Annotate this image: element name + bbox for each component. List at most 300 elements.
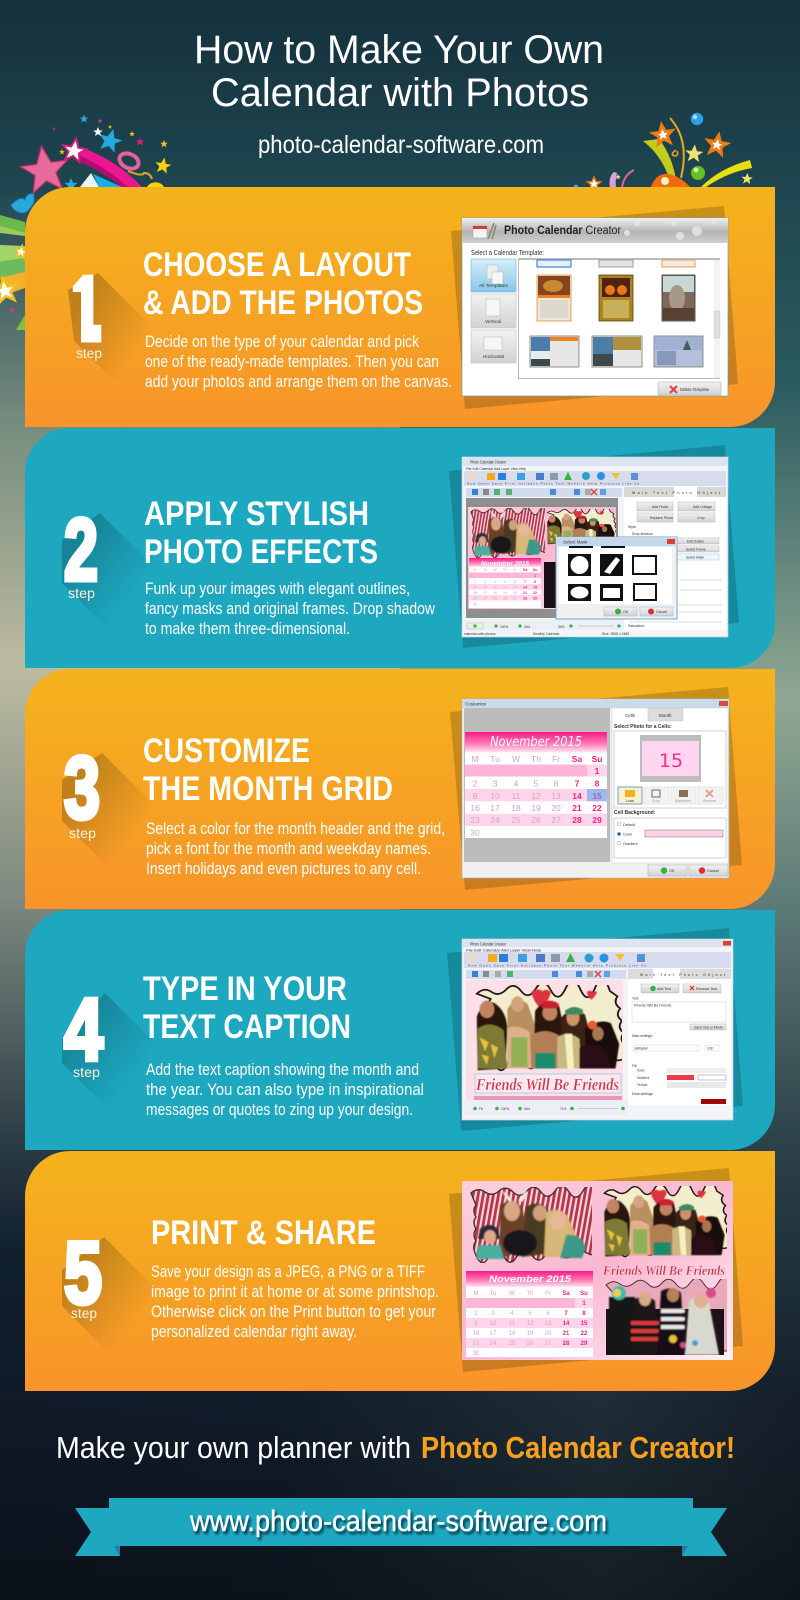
category: vertical — [471, 294, 516, 328]
description: fancy masks and original frames. Drop shadow — [145, 599, 436, 618]
description: Funk up your images with elegant outlines, — [145, 579, 410, 598]
calendar: 13 — [513, 586, 517, 590]
right panel: Color — [637, 1068, 646, 1072]
calendar: 11 — [493, 586, 497, 590]
screenshot: text caption: File Edit Calendar Add Layer View Help — [466, 948, 541, 952]
screenshot: photo effects: Photo Calendar Creator — [470, 460, 506, 464]
settings column: Month — [659, 713, 672, 718]
screenshot: text caption — [462, 939, 733, 1120]
calendar preview: Tu — [490, 754, 500, 764]
dialog: select mask — [556, 537, 677, 619]
calendar preview: 29 — [592, 815, 602, 825]
step label: step — [69, 825, 96, 841]
number shadow — [62, 993, 155, 1113]
screenshot: customize dialog: Customize — [465, 702, 487, 706]
photo: party group — [606, 1277, 735, 1355]
calendar preview: 22 — [592, 803, 602, 813]
photo: hawaii group — [604, 1181, 731, 1257]
number shadow — [62, 1237, 154, 1356]
calendar: 17 — [490, 1331, 497, 1337]
next photo strip — [474, 1096, 622, 1100]
step number: 1 — [72, 262, 100, 357]
calendar preview: 4 — [514, 778, 519, 788]
secondary toolbar — [466, 970, 626, 979]
number shadow — [68, 273, 150, 393]
heading: APPLY STYLISH — [144, 495, 369, 533]
calendar preview: 24 — [490, 815, 500, 825]
calendar preview: 21 — [572, 803, 582, 813]
calendar: 9 — [474, 1321, 478, 1327]
website subtitle: photo-calendar-software.com — [258, 131, 544, 159]
step label: step — [71, 1305, 97, 1321]
caption: Friends Will Be Friends — [602, 1264, 725, 1279]
ok button — [648, 865, 687, 876]
calendar: 16 — [473, 1331, 480, 1337]
description: the year. You can also type in inspirational — [146, 1080, 424, 1099]
step number: 4 — [64, 980, 103, 1079]
screenshot: photo effects: File Edit Calendar Add Layer View Help — [466, 467, 526, 471]
settings column — [612, 708, 728, 863]
calendar preview: 11 — [512, 791, 521, 801]
calendar preview: 9 — [473, 791, 478, 801]
right panel: Add Photo — [652, 505, 668, 509]
right panel: Replace Photo — [650, 516, 673, 520]
panel background — [25, 669, 775, 909]
calendar: 7 — [564, 1311, 568, 1317]
heading: TEXT CAPTION — [143, 1008, 351, 1046]
calendar: W — [509, 1291, 515, 1297]
calendar: Th — [503, 568, 507, 572]
photo: bunny group — [471, 507, 551, 558]
heading — [143, 246, 423, 322]
calendar: Su — [533, 568, 537, 572]
description — [146, 819, 445, 878]
right panel: Text: — [632, 996, 639, 1000]
calendar: 10 — [490, 1321, 497, 1327]
right panel — [624, 486, 726, 630]
screenshot: template chooser — [462, 218, 728, 396]
status bar: 71% — [560, 1107, 567, 1111]
calendar: W — [493, 568, 497, 572]
description: image to print it at home or at some printshop. — [151, 1282, 439, 1301]
panel background — [25, 187, 775, 427]
calendar: 4 — [494, 580, 496, 584]
description: Insert holidays and even pictures to any cell. — [146, 859, 421, 878]
calendar: 10 — [483, 586, 487, 590]
right panel: Insert Year or Month — [694, 1026, 723, 1030]
delete button: Delete Template — [680, 387, 709, 392]
photo: party — [544, 562, 574, 608]
heading: CUSTOMIZE — [143, 732, 310, 770]
right panel: Friends Will Be Friends — [634, 1004, 671, 1008]
settings column: Select Photo for a Cells: — [614, 724, 672, 730]
description: Decide on the type of your calendar and pick — [145, 332, 419, 351]
settings column: Cell Background: — [614, 810, 656, 816]
calendar preview: Sa — [572, 754, 582, 764]
confetti left — [0, 114, 172, 330]
calendar preview: 27 — [551, 815, 561, 825]
description: personalized calendar right away. — [151, 1322, 357, 1341]
status bar: Grid — [524, 625, 530, 629]
calendar: 29 — [581, 1341, 588, 1347]
calendar: 19 — [527, 1331, 534, 1337]
calendar: November 2015 — [489, 1274, 572, 1285]
right tail — [682, 1508, 727, 1556]
calendar: 24 — [483, 596, 487, 600]
tilted backing — [449, 1168, 743, 1372]
calendar: 13 — [545, 1321, 552, 1327]
photo: hawaii group — [477, 979, 627, 1070]
calendar: 16 — [473, 591, 477, 595]
calendar preview: 7 — [575, 778, 580, 788]
description — [151, 1262, 439, 1341]
calendar: 11 — [509, 1321, 516, 1327]
right panel: Main Text Photo Object — [640, 973, 726, 977]
settings column: Remove — [703, 799, 716, 803]
description: Add the text caption showing the month and — [146, 1060, 419, 1079]
right panel: Fill: — [632, 1064, 637, 1068]
calendar: 4 — [510, 1311, 514, 1317]
calendar: 14 — [563, 1321, 570, 1327]
secondary toolbar — [466, 488, 622, 497]
step number: 2 — [64, 500, 98, 599]
calendar preview: 2 — [473, 778, 478, 788]
calendar: 25 — [509, 1341, 516, 1347]
calendar: 27 — [545, 1341, 552, 1347]
screenshot: photo effects: Size: 3508 x 2480 — [602, 632, 629, 636]
calendar preview: 16 — [470, 803, 480, 813]
description: pick a font for the month and weekday names. — [146, 839, 431, 858]
left fold — [114, 1546, 120, 1556]
calendar: M — [474, 568, 476, 572]
right panel — [628, 968, 731, 1105]
right panel: Crop — [697, 516, 705, 520]
calendar: Su — [580, 1291, 588, 1297]
calendar: 12 — [503, 586, 507, 590]
calendar: 28 — [523, 596, 527, 600]
calendar preview: 3 — [493, 778, 498, 788]
description: Select a color for the month header and the grid, — [146, 819, 445, 838]
settings column: Alignment — [675, 799, 691, 803]
description: Save your design as a JPEG, a PNG or a TIFF — [151, 1262, 425, 1281]
call to action: Make your own planner with — [56, 1430, 411, 1465]
calendar: 18 — [493, 591, 497, 595]
canvas page — [468, 507, 616, 609]
panel: step 5 — [25, 1151, 775, 1391]
calendar preview: 18 — [511, 803, 521, 813]
snow decoration — [624, 220, 715, 240]
right panel: Texture — [637, 1083, 648, 1087]
grey preview area — [464, 708, 610, 862]
screenshot: photo effects: Monthly Calendar — [533, 632, 560, 636]
calendar: 30 — [473, 1351, 480, 1357]
call to action — [56, 1430, 735, 1465]
toolbar — [464, 952, 731, 968]
toolbar — [464, 471, 726, 486]
status bar: 100% — [500, 625, 508, 629]
calendar: Th — [526, 1291, 534, 1297]
caption: Friends Will Be Friends — [475, 1075, 619, 1094]
calendar preview: Fr — [552, 754, 560, 764]
calendar: 9 — [474, 586, 476, 590]
calendar preview: 25 — [511, 815, 521, 825]
step number: 3 — [64, 738, 100, 837]
status bar: Fit — [479, 1107, 483, 1111]
calendar — [469, 558, 541, 608]
photo: bunny group — [471, 1185, 601, 1263]
calendar: 25 — [493, 596, 497, 600]
workspace — [466, 498, 618, 618]
panel: step 4 — [25, 910, 775, 1150]
calendar: 24 — [490, 1341, 497, 1347]
category: horizontal: Horizontal — [483, 354, 504, 359]
calendar preview: November 2015 — [490, 734, 582, 750]
description: add your photos and arrange them on the canvas. — [145, 372, 452, 391]
step label: step — [76, 345, 102, 361]
settings column: Color — [623, 832, 633, 836]
right panel: Drop shadow — [632, 532, 653, 536]
status bar — [464, 620, 624, 630]
calendar: 1 — [582, 1301, 586, 1307]
calendar: Tu — [483, 568, 487, 572]
right panel: Select Frame — [686, 548, 706, 552]
heading: PRINT & SHARE — [151, 1214, 376, 1252]
screenshot: photo effects — [462, 457, 728, 637]
calendar preview: 15 — [592, 791, 602, 801]
app title: Photo Calendar Creator — [504, 225, 621, 237]
panel: step 2 — [25, 428, 775, 668]
step label: step — [73, 1064, 100, 1080]
settings column: Load — [626, 799, 634, 803]
calendar preview: 28 — [572, 815, 582, 825]
calendar: Tu — [490, 1291, 496, 1297]
calendar preview: 5 — [534, 778, 539, 788]
description — [145, 332, 452, 391]
step label: step — [68, 585, 95, 601]
calendar: Fr — [545, 1291, 551, 1297]
calendar: 12 — [527, 1321, 534, 1327]
right panel: Saturation: — [628, 624, 645, 628]
calendar preview: M — [471, 754, 479, 764]
template list — [518, 258, 720, 378]
category: horizontal — [471, 330, 516, 363]
calendar: 22 — [533, 591, 537, 595]
calendar — [466, 1271, 593, 1357]
calendar preview: 6 — [554, 778, 559, 788]
panel background — [25, 1151, 775, 1391]
call to action: Photo Calendar Creator! — [421, 1430, 735, 1465]
calendar: 8 — [582, 1311, 586, 1317]
category: all templates — [471, 259, 516, 292]
dialog: select mask: OK — [623, 610, 629, 614]
description — [145, 579, 436, 638]
confetti right — [574, 113, 753, 190]
heading — [143, 970, 351, 1046]
cancel button — [689, 865, 728, 876]
right panel: More settings: — [632, 1092, 653, 1096]
right panel: Main Text Photo Object — [632, 490, 721, 495]
calendar: 17 — [483, 591, 487, 595]
left tail — [75, 1508, 120, 1556]
settings column: 15 — [659, 750, 683, 772]
calendar: 2 — [474, 580, 476, 584]
right panel: Main settings: — [632, 1034, 653, 1038]
calendar: 3 — [491, 1311, 495, 1317]
settings column: Default — [623, 823, 636, 827]
right panel: Add Collage — [693, 505, 712, 509]
cancel button: Cancel — [707, 869, 719, 873]
panel: step 1 — [25, 187, 775, 427]
category: vertical: Vertical — [485, 319, 501, 324]
calendar: 27 — [513, 596, 517, 600]
status bar — [464, 1100, 628, 1115]
calendar preview: 23 — [470, 815, 480, 825]
list label: Select a Calendar Template: — [471, 248, 544, 257]
calendar: 30 — [473, 602, 477, 606]
ribbon url: www.photo-calendar-software.com — [189, 1505, 607, 1538]
right panel: 128 — [707, 1046, 713, 1050]
panel background — [25, 428, 775, 668]
delete button — [658, 382, 721, 395]
description: messages or quotes to zing up your design. — [146, 1100, 413, 1119]
calendar preview — [465, 732, 607, 838]
screenshot: text caption: Photo Calendar Creator — [470, 942, 506, 946]
photo: hawaii group — [547, 507, 618, 544]
calendar: 1 — [534, 574, 536, 578]
category: all templates: All Templates — [479, 283, 509, 288]
screenshot: photo effects: calendar-with-photos — [464, 632, 496, 636]
status bar: Grid — [524, 1107, 530, 1111]
calendar: 15 — [581, 1321, 588, 1327]
right panel: Remove Text — [696, 987, 717, 991]
calendar: 7 — [524, 580, 526, 584]
calendar: 15 — [533, 586, 537, 590]
calendar preview: 20 — [551, 803, 561, 813]
calendar: 23 — [473, 596, 477, 600]
calendar: 2 — [474, 1311, 478, 1317]
calendar: November 2015 — [481, 560, 529, 568]
calendar: 8 — [534, 580, 536, 584]
calendar: 19 — [503, 591, 507, 595]
calendar preview: 14 — [572, 791, 582, 801]
calendar preview: 1 — [595, 766, 600, 776]
calendar preview: 17 — [490, 803, 500, 813]
calendar: 23 — [473, 1341, 480, 1347]
calendar preview: Su — [592, 754, 602, 764]
title: Calendar with Photos — [211, 71, 589, 115]
ribbon — [75, 1498, 727, 1556]
heading — [143, 732, 393, 808]
tilted backing — [451, 206, 738, 409]
calendar preview: 10 — [490, 791, 500, 801]
description: one of the ready-made templates. Then you can — [145, 352, 439, 371]
title — [194, 28, 604, 115]
calendar: 21 — [523, 591, 527, 595]
right panel: Select Mask — [686, 556, 704, 560]
step number: 5 — [64, 1223, 102, 1322]
status bar: 34% — [558, 625, 565, 629]
screenshot: customize dialog — [462, 699, 729, 878]
tilted backing — [449, 445, 739, 648]
description: Otherwise click on the Print button to get your — [151, 1302, 436, 1321]
calendar: 20 — [513, 591, 517, 595]
calendar: 5 — [528, 1311, 532, 1317]
panel: step 3 — [25, 669, 775, 909]
calendar preview: 26 — [531, 815, 541, 825]
heading: THE MONTH GRID — [143, 770, 393, 808]
heading — [144, 495, 378, 571]
printed calendar page — [462, 1181, 735, 1360]
tilted backing — [447, 928, 743, 1131]
calendar preview: 19 — [531, 803, 541, 813]
settings column: Cells — [625, 713, 636, 718]
calendar preview: Th — [531, 754, 541, 764]
tilted backing — [450, 687, 742, 890]
heading: PHOTO EFFECTS — [144, 533, 378, 571]
canvas — [466, 980, 623, 1100]
toolbar: New Open Save Print Holidays Photo Text Website Help Products Like Us — [468, 964, 646, 968]
calendar preview: 13 — [551, 791, 561, 801]
calendar: 18 — [509, 1331, 516, 1337]
calendar: 22 — [581, 1331, 588, 1337]
calendar: 21 — [563, 1331, 570, 1337]
right panel: Edit Outline — [687, 540, 704, 544]
right panel: Add Text — [657, 987, 671, 991]
settings column: Crop — [652, 799, 660, 803]
calendar: 6 — [546, 1311, 550, 1317]
calendar: 26 — [527, 1341, 534, 1347]
description — [146, 1060, 424, 1119]
calendar: Fr — [513, 568, 517, 572]
toolbar: New Open Save Print Holidays Photo Text Website Help Products Like Us — [467, 482, 640, 486]
calendar preview: 12 — [531, 791, 541, 801]
description: to make them three-dimensional. — [145, 619, 350, 638]
heading: CHOOSE A LAYOUT — [143, 246, 411, 284]
right fold — [682, 1546, 688, 1556]
app icon — [473, 223, 496, 239]
right panel: Gradient — [637, 1076, 649, 1080]
calendar: Sa — [562, 1291, 570, 1297]
calendar: M — [474, 1291, 478, 1297]
calendar preview: W — [512, 754, 520, 764]
number shadow — [62, 753, 152, 871]
calendar: 29 — [533, 596, 537, 600]
ok button: OK — [669, 869, 675, 873]
calendar: Sa — [523, 568, 528, 572]
calendar: 28 — [563, 1341, 570, 1347]
right panel: Jellicybel — [634, 1046, 648, 1050]
calendar: 5 — [504, 580, 506, 584]
ribbon band — [109, 1498, 693, 1546]
calendar: 3 — [484, 580, 486, 584]
settings column: Gradient — [623, 842, 639, 846]
panel background — [25, 910, 775, 1150]
calendar preview: 8 — [595, 778, 600, 788]
dialog: select mask: Cancel — [656, 610, 667, 614]
calendar: 14 — [523, 586, 527, 590]
title: How to Make Your Own — [194, 28, 604, 72]
caption selection box — [475, 1074, 621, 1093]
calendar: 20 — [545, 1331, 552, 1337]
calendar: 26 — [503, 596, 507, 600]
calendar: 6 — [514, 580, 516, 584]
dialog: select mask: Select Mask — [563, 540, 588, 544]
calendar preview: 30 — [470, 828, 480, 838]
heading: TYPE IN YOUR — [143, 970, 347, 1008]
heading: & ADD THE PHOTOS — [143, 284, 423, 322]
number shadow — [62, 513, 150, 633]
right panel: Style — [628, 525, 636, 529]
